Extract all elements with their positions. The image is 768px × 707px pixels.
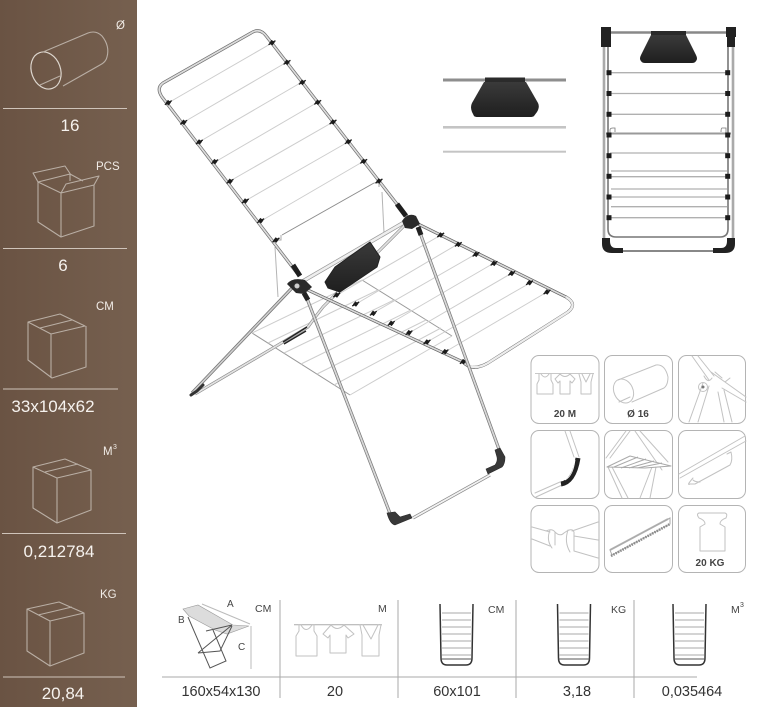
lower shelf [252,280,452,395]
icon card: 20 kg weight [678,506,746,572]
panel: brown sidebar [0,0,137,707]
icon card: 20 m line: 20 M [554,409,576,420]
icon card: shield detail [678,430,746,498]
label: volume unit: 3 [113,444,117,451]
icon: small rack with dimensions: C [238,642,245,653]
label: volume unit: M [103,446,113,458]
label: weight unit: KG [100,589,117,601]
label: carton size unit: CM [96,301,114,313]
back legs [191,226,404,395]
lower panel frame [297,220,573,367]
icon card: black foot [531,430,599,498]
icon card: lower shelf [604,430,672,498]
icon card: diameter 16: Ø 16 [627,409,649,420]
black feet [387,448,505,525]
icon: small rack with dimensions: A [227,599,234,610]
upper panel clips [164,40,383,243]
icon: carton box [28,314,86,378]
value: pieces: 6 [58,256,68,275]
icon card: 20 m line [531,356,599,424]
label: pieces unit: PCS [96,161,120,173]
icon: volume box [33,459,91,523]
upper panel frame [159,31,407,276]
value: diameter: 16 [61,116,79,135]
label: size unit: CM [255,603,271,615]
feature icon grid [531,356,746,572]
label: volume unit [103,444,117,458]
front legs and bottom bar [306,230,500,518]
lower panel clips [333,232,551,365]
label: line unit: M [378,603,387,615]
value: open size: 160x54x130 [181,684,261,700]
label: diameter unit: Ø [116,20,125,32]
icon: shirts on line [294,625,382,656]
value: weight: 20,84 [42,684,84,703]
icon card: diameter 16 [604,356,672,424]
label: rack volume unit: 3 [740,602,744,609]
value: rack weight: 3,18 [563,684,591,700]
detail: rack top view [601,27,736,253]
label: rack weight unit: KG [611,604,626,616]
icon card: rail with clips [604,506,672,572]
icon: weight box [27,602,84,666]
icon: open box [33,166,99,237]
icon: rack volume [673,604,706,665]
specification table [162,599,744,700]
upper panel wires [168,43,384,297]
value: rack volume: 0,035464 [662,684,722,700]
detail: bar and shield close-up [443,78,566,153]
icon card: pivot joint [678,356,746,424]
central shield [325,242,380,292]
icon card: clip close-up [531,506,599,572]
label: folded unit: CM [488,604,504,616]
label: rack volume unit: M [731,604,740,616]
lower panel wires [337,235,547,352]
main product: drying rack [159,31,573,525]
icon: rack folded [440,604,473,665]
icon: rack weight [558,604,590,665]
cross bar [298,223,403,284]
icon: small rack with dimensions [178,599,251,669]
label: rack volume unit [731,602,744,616]
icon card: 20 kg weight: 20 KG [696,558,725,569]
value: carton size: 33x104x62 [11,397,95,416]
icon: tube diameter [26,32,108,93]
icon: small rack with dimensions: B [178,615,185,626]
value: line length: 20 [327,684,343,700]
pivot joints [287,215,421,300]
value: volume: 0,212784 [24,542,94,561]
value: folded size: 60x101 [433,684,481,700]
